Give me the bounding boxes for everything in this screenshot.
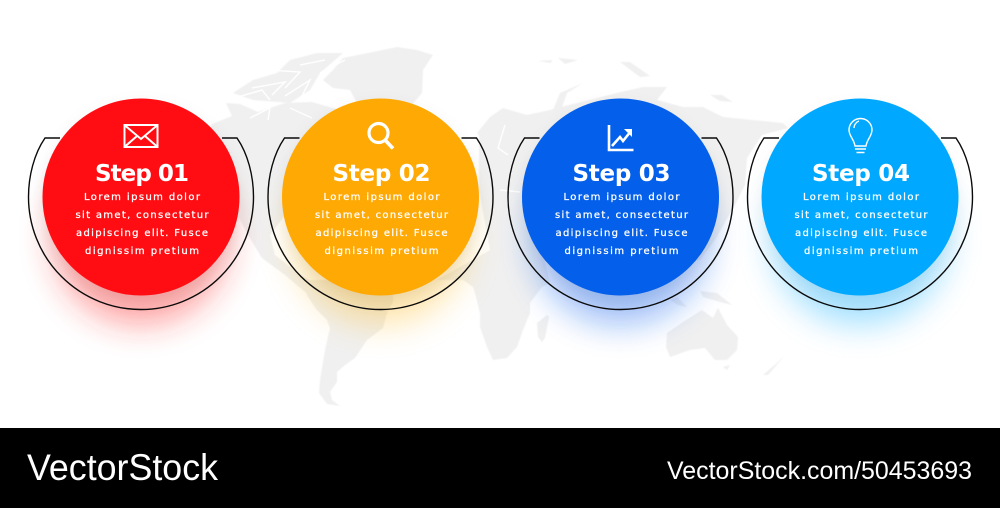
text: adipiscing elit. Fusce xyxy=(76,228,208,239)
text xyxy=(794,192,928,257)
circle xyxy=(282,98,479,296)
circle xyxy=(762,98,958,296)
text: adipiscing elit. Fusce xyxy=(556,228,688,239)
glow xyxy=(53,148,229,324)
logo text: VectorStock xyxy=(27,447,218,488)
ring xyxy=(268,138,493,310)
text: dignissim pretium xyxy=(85,246,199,257)
text: sit amet, consectetur xyxy=(76,210,209,221)
text: Lorem ipsum dolor xyxy=(564,192,680,203)
text: sit amet, consectetur xyxy=(794,210,928,221)
step 1 xyxy=(28,98,254,324)
world map xyxy=(205,47,788,406)
heading: Step 01 xyxy=(95,161,189,187)
icon: chart xyxy=(609,125,634,150)
icon: magnifier xyxy=(369,124,393,148)
text: dignissim pretium xyxy=(804,246,918,257)
circle xyxy=(522,98,719,296)
heading: Step 04 xyxy=(812,161,910,187)
text: dignissim pretium xyxy=(564,246,678,257)
shadow xyxy=(282,105,478,301)
shadow xyxy=(43,105,239,301)
heading: Step 02 xyxy=(332,161,430,187)
step 2 xyxy=(268,98,493,324)
icon: envelope xyxy=(124,125,158,147)
map sea cut-outs xyxy=(238,60,520,192)
step 3 xyxy=(508,98,733,324)
text: Lorem ipsum dolor xyxy=(324,192,440,203)
text xyxy=(76,192,209,257)
ring xyxy=(508,138,733,310)
glow xyxy=(772,148,948,324)
url text: VectorStock.com/50453693 xyxy=(667,457,972,485)
icon: light bulb xyxy=(849,118,872,152)
text: sit amet, consectetur xyxy=(315,210,449,221)
text: Lorem ipsum dolor xyxy=(803,192,920,203)
ring xyxy=(28,138,254,310)
text: Lorem ipsum dolor xyxy=(84,192,201,203)
glow xyxy=(532,148,708,324)
text xyxy=(555,192,689,257)
text xyxy=(315,192,449,257)
step 4 xyxy=(748,98,972,324)
shadow xyxy=(762,105,958,301)
circle xyxy=(42,98,240,296)
text: dignissim pretium xyxy=(324,246,438,257)
text: sit amet, consectetur xyxy=(555,210,689,221)
heading: Step 03 xyxy=(572,161,670,187)
footer banner xyxy=(0,428,1000,508)
text: adipiscing elit. Fusce xyxy=(795,228,927,239)
ring xyxy=(748,138,972,310)
shadow xyxy=(522,105,718,301)
text: adipiscing elit. Fusce xyxy=(316,228,448,239)
glow xyxy=(292,148,468,324)
